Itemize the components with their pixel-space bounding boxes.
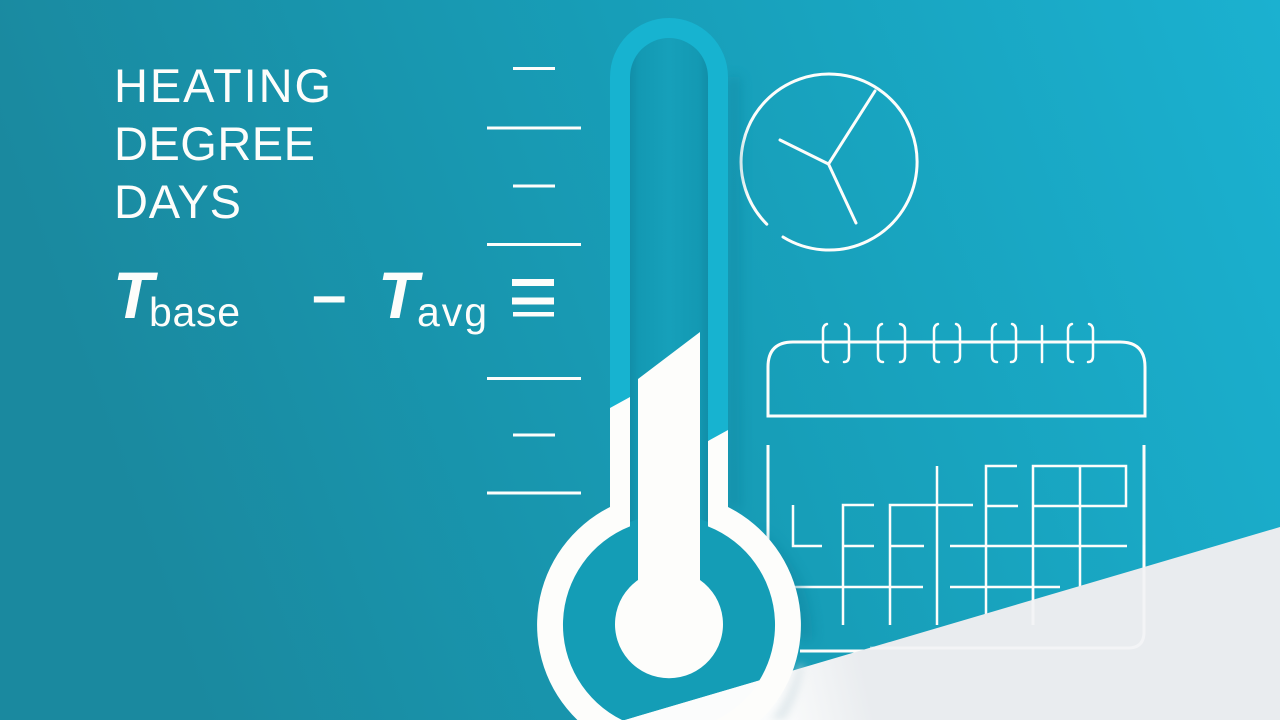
mercury column and bulb [615, 332, 723, 678]
title [114, 59, 331, 228]
sheet: bottom right corner [625, 527, 1280, 720]
tube inner [630, 38, 708, 530]
title: HEATING [114, 59, 331, 112]
white ring and lower tube walls [537, 397, 801, 720]
formula: T [378, 258, 423, 332]
bulb interior [559, 515, 779, 720]
tube glass [610, 18, 728, 440]
ring shadow on sheet [770, 665, 804, 720]
formula: avg [417, 289, 487, 335]
tube shadow [728, 77, 740, 510]
bulb shadow [760, 530, 812, 640]
icon: calendar [768, 324, 1145, 651]
icon: clock [741, 74, 917, 250]
thermometer [537, 18, 1280, 720]
formula: – [312, 261, 346, 330]
formula [113, 258, 487, 335]
title: DEGREE [114, 117, 315, 170]
formula: T [113, 258, 158, 332]
formula: base [149, 289, 240, 335]
thermometer scale ticks [487, 67, 581, 494]
title: DAYS [114, 175, 241, 228]
sheet edge inside ring [625, 665, 768, 720]
